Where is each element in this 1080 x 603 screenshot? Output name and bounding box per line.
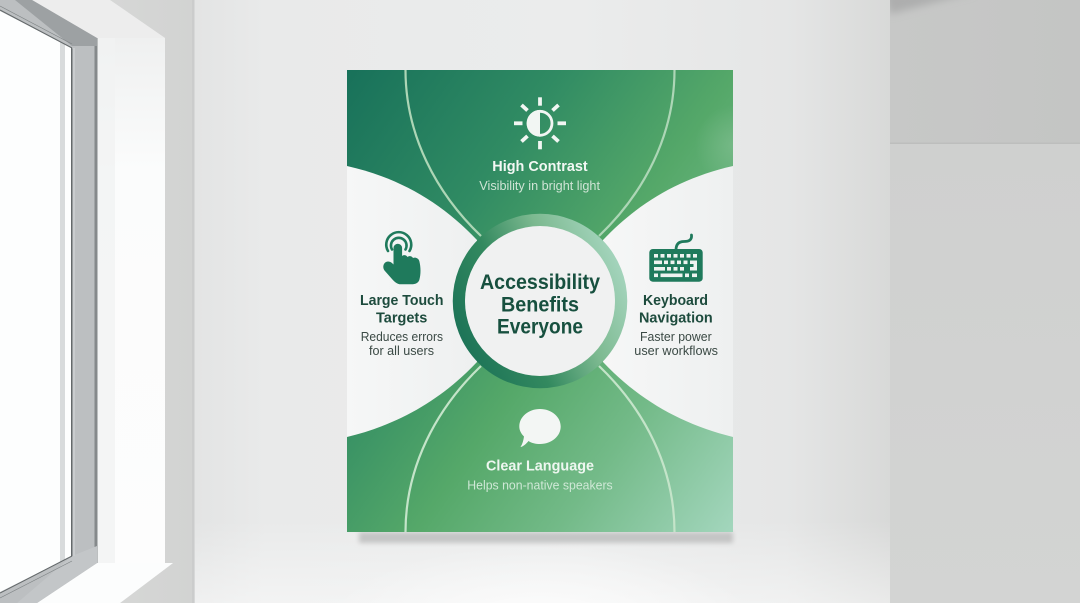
icon: speech bubble	[519, 409, 561, 447]
window reveal	[32, 0, 173, 603]
title: Everyone	[497, 314, 583, 338]
central ring	[459, 220, 621, 382]
text: large touch targets: Large Touch	[360, 293, 444, 309]
decorative arc: bottom	[406, 366, 674, 532]
text: large touch targets	[360, 293, 444, 358]
panel: keyboard navigation white lobe	[603, 166, 733, 437]
text: keyboard navigation: Navigation	[639, 311, 713, 327]
icon: sun contrast	[514, 97, 566, 149]
poster shadow	[359, 532, 733, 543]
text: large touch targets: Reduces errors	[361, 330, 443, 344]
icon: touch hand	[383, 232, 421, 284]
window glass	[0, 6, 72, 598]
text: large touch targets: Targets	[376, 311, 427, 327]
poster panel	[347, 70, 733, 532]
title: Accessibility	[480, 270, 600, 294]
text: keyboard navigation: user workflows	[634, 344, 718, 358]
text: high contrast	[479, 159, 601, 193]
right wall	[890, 0, 1080, 254]
decorative arc: top	[406, 70, 674, 236]
panel: large touch targets white lobe	[347, 166, 477, 437]
text: clear language: Helps non-native speakers	[467, 478, 613, 492]
text: clear language	[467, 459, 613, 492]
title	[480, 270, 600, 338]
window frame	[0, 0, 98, 603]
text: keyboard navigation: Keyboard	[643, 293, 708, 309]
text: keyboard navigation	[634, 293, 718, 358]
title: Benefits	[501, 292, 579, 316]
text: keyboard navigation: Faster power	[640, 330, 712, 344]
text: large touch targets: for all users	[369, 344, 434, 358]
text: high contrast: Visibility in bright light	[479, 179, 601, 193]
icon: keyboard	[649, 235, 703, 282]
central circle	[465, 226, 615, 376]
text: high contrast: High Contrast	[492, 159, 588, 175]
text: clear language: Clear Language	[486, 459, 594, 475]
side wall section	[110, 0, 193, 603]
